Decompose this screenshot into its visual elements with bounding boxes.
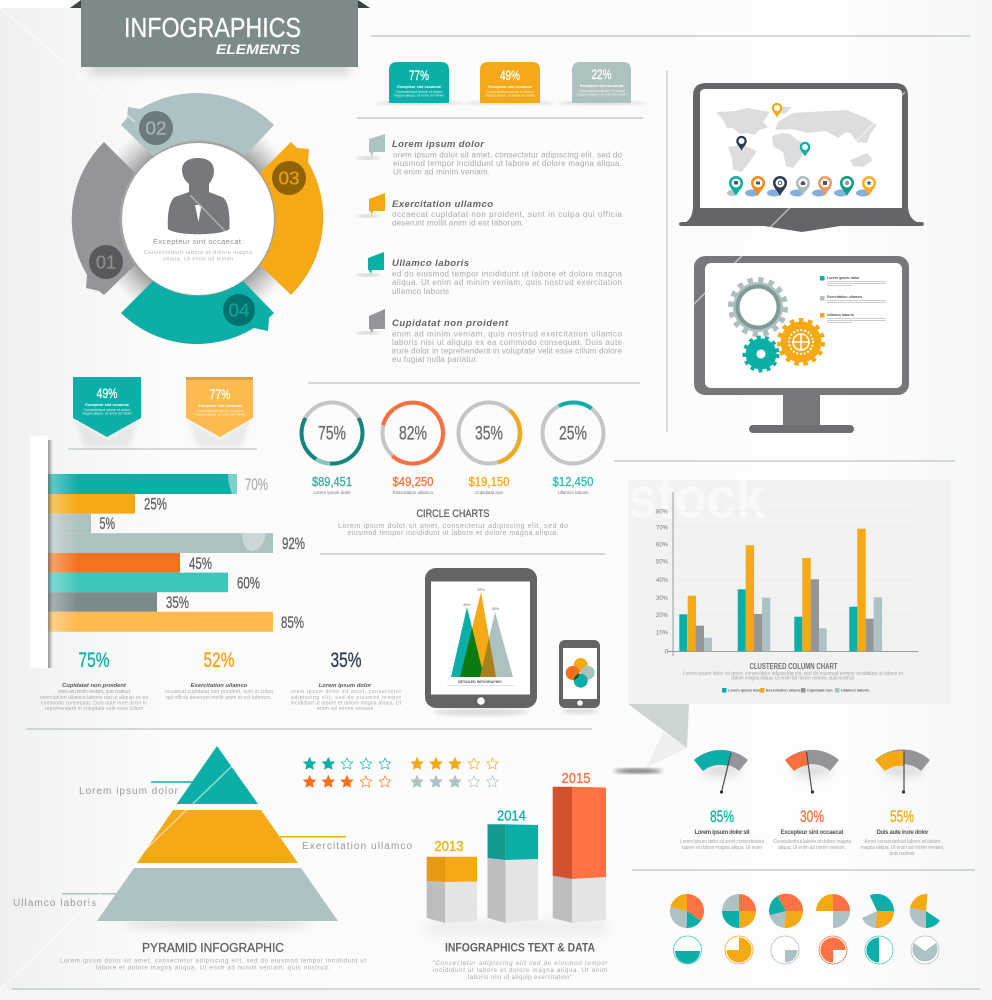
list item: Ullamco laboris: Ullamco laboris bbox=[392, 258, 469, 269]
circle chart 82%: 82% bbox=[399, 424, 427, 444]
red stars bbox=[304, 776, 391, 787]
circle chart 25% bbox=[542, 402, 604, 495]
horizontal bar chart bbox=[30, 436, 305, 668]
column 2013: 2013 bbox=[434, 838, 464, 855]
circle chart 25%: 25% bbox=[559, 424, 587, 444]
venn icon bbox=[566, 658, 595, 688]
icon pins row bbox=[727, 176, 876, 196]
column 2015: 2015 bbox=[562, 770, 590, 787]
ring 3 bbox=[771, 936, 799, 964]
gear: grey bbox=[731, 280, 785, 334]
chart legend: Cupidatat non bbox=[807, 688, 833, 692]
column chart caption: incididunt ut labore et dolore magna aliqua. Ut enim bbox=[433, 968, 607, 974]
circle chart 75%: $89,451 bbox=[312, 474, 352, 489]
chart axes and ticks: 70% bbox=[656, 526, 669, 532]
column 2014: 2014 bbox=[497, 808, 526, 824]
chart axes and ticks: 30% bbox=[656, 596, 669, 602]
stat: 35%: 35% bbox=[330, 649, 362, 672]
stat: 35%: orem ipsum dolor sit amet, consectetur bbox=[291, 689, 401, 695]
ribbon: 49%: magna aliqua. Ut enim ad minim bbox=[82, 412, 132, 416]
percent card: 49%: magna aliqua. Ut enim ad minim bbox=[485, 94, 535, 98]
stat: 75%: reprehenderit in voluptate velit esse cillum bbox=[45, 706, 143, 712]
segment 01: 01 bbox=[96, 252, 116, 272]
chart axes and ticks: 80% bbox=[656, 510, 669, 516]
clustered column chart panel: stock bbox=[628, 466, 766, 531]
triangle chart: 60% bbox=[463, 603, 471, 607]
pie 2 bbox=[722, 894, 756, 928]
orange stars bbox=[411, 758, 498, 769]
circle charts caption bbox=[338, 508, 568, 537]
percent card: 49%: Consectedout labore et dolore bbox=[487, 90, 533, 94]
ribbon: 77%: magna aliqua. Ut enim ad minim bbox=[195, 412, 245, 416]
list item: Cupidatat non proident: laboris nisi ut aliquip ex ea commodo consequat. Duis aute bbox=[392, 338, 623, 347]
pie 5 bbox=[862, 894, 894, 928]
chart title bbox=[683, 662, 904, 682]
gauge: 85%: Lorem ipsum dolor sit bbox=[694, 830, 750, 836]
gauge: 55%: quis nostrud. bbox=[890, 851, 916, 857]
gauge: 85% bbox=[680, 750, 765, 851]
ribbon: 77%: Excepteur sint occaecat bbox=[198, 404, 242, 408]
triangle chart: DETAILED INFOGRAPHIC bbox=[458, 680, 502, 684]
ring 5 bbox=[865, 936, 893, 964]
bar value labels: 5% bbox=[100, 514, 115, 533]
center circle with person bbox=[122, 143, 274, 295]
stat: 35%: incididunt ut labore et dolore magna aliqua. Ut bbox=[291, 700, 402, 706]
list item: Cupidatat non proident: irure dolor in reprehenderit in voluptate velit esse cillum dolore bbox=[392, 346, 623, 356]
bar value labels: 70% bbox=[245, 475, 268, 494]
percent card: 49%: 49% bbox=[500, 67, 520, 83]
gauge: 30%: aliqua. Ut enim ad minim veniam. bbox=[778, 845, 846, 851]
circle charts bbox=[302, 402, 604, 495]
center circle with person: Excepteur sint occaecat bbox=[153, 237, 242, 246]
3D column chart bbox=[427, 770, 608, 981]
ring 6 bbox=[911, 936, 939, 964]
gear legend bbox=[820, 276, 886, 323]
pyramid infographic: labore et dolore magna aliqua. Ut enim ad minim veniam, quis nostrud. bbox=[96, 966, 330, 972]
ribbon: 49% bbox=[73, 377, 141, 447]
ribbon: 49%: Consectedout labore et dolore bbox=[84, 408, 130, 412]
list item: Ullamco laboris bbox=[357, 252, 623, 296]
gauge: 30%: Excepteur sint occaecat bbox=[780, 830, 844, 836]
gauge: 55%: Duis aute irure dolor bbox=[876, 830, 929, 836]
circle charts caption: CIRCLE CHARTS bbox=[416, 508, 490, 520]
column chart caption bbox=[432, 940, 608, 981]
circle charts caption: eiusmod tempor incididunt ut labore et dolore magna aliqua. bbox=[348, 530, 559, 537]
chart legend: Ullamco laboris bbox=[841, 688, 869, 692]
gauge: 30%: 30% bbox=[800, 807, 824, 826]
gauge: 85%: Lorem ipsum dolor sit amet,consectedout bbox=[680, 839, 765, 845]
ribbon: 49%: 49% bbox=[96, 385, 118, 401]
percent card: 49%: Excepteur sint occaecat bbox=[488, 85, 532, 89]
pyramid infographic: Exercitation ullamco bbox=[302, 841, 412, 852]
bar value labels: 45% bbox=[189, 554, 212, 573]
triangle chart: 55% bbox=[492, 607, 499, 611]
stat: 52% bbox=[165, 649, 273, 701]
chart title: dolore magna aliqua. Ut enim ad minim veniam, quis nostrud. bbox=[731, 676, 855, 682]
percent card: 22%: 22% bbox=[592, 66, 612, 82]
chart legend: Exercitation ullamco bbox=[766, 688, 804, 692]
circle chart 25%: Ullamco laboris bbox=[558, 490, 589, 495]
chart legend bbox=[722, 688, 869, 692]
pyramid infographic: Lorem ipsum dolor sit amet, consectetur adipiscing elit, sed do eiusmod tempor incididunt ut bbox=[60, 958, 366, 964]
list item: Exercitation ullamco: occaecat cupidatat non proident, sunt in culpa qui officia bbox=[392, 210, 623, 219]
list item: Exercitation ullamco: deserunt mollit anim id est laborum. bbox=[392, 218, 524, 228]
list item: Ullamco laboris: ed do eiusmod tempor incididunt ut labore et dolore magna bbox=[392, 270, 623, 278]
gear legend: Lorem ipsum dolor bbox=[827, 276, 860, 280]
column 2015 bbox=[553, 770, 606, 923]
header banner bbox=[70, 0, 370, 74]
gauge: 55%: magna aliqua. Ut enim ad minim veniam, bbox=[860, 845, 944, 851]
clustered column chart panel bbox=[628, 466, 951, 704]
stat: 35%: Lorem ipsum dolor bbox=[319, 683, 372, 689]
stat: 52%: Exercitation ullamco bbox=[191, 683, 248, 689]
stat: 35%: adipiscing elit, sed do eiusmod tempor bbox=[291, 695, 401, 701]
segment 01 bbox=[72, 142, 135, 295]
circle chart 75%: 75% bbox=[318, 424, 346, 444]
chart axes and ticks bbox=[656, 492, 918, 656]
list item: Cupidatat non proident: enim ad minim veniam, quis nostrud exercitation ullamco bbox=[392, 330, 623, 338]
list item: Cupidatat non proident bbox=[357, 309, 623, 364]
center circle with person: Consectedout labore et dolore magna bbox=[144, 250, 253, 256]
ribbon: 77% bbox=[186, 377, 253, 447]
pie 3 bbox=[769, 894, 803, 928]
triangle chart bbox=[447, 588, 514, 686]
icon: person bbox=[168, 158, 230, 234]
world map bbox=[716, 107, 877, 172]
teal stars bbox=[304, 758, 391, 769]
list item: Lorem ipsum dolor bbox=[357, 134, 623, 176]
ring 4 bbox=[819, 936, 847, 964]
list item: Lorem ipsum dolor: Lorem ipsum dolor bbox=[392, 139, 485, 150]
gear: orange bbox=[780, 320, 822, 364]
column chart caption: INFOGRAPHICS TEXT & DATA bbox=[445, 940, 595, 954]
ribbon: 77%: Consectedout labore et dolore bbox=[197, 409, 243, 413]
circle chart 75%: Lorem ipsum dolor bbox=[313, 490, 351, 495]
circular process diagram bbox=[72, 93, 323, 344]
pie 1 bbox=[670, 894, 704, 928]
chart axes and ticks: 50% bbox=[656, 560, 669, 566]
text list bbox=[357, 134, 623, 364]
circle chart 35%: $19,150 bbox=[468, 474, 510, 489]
tablet bbox=[425, 568, 537, 716]
triangle chart: 82% bbox=[477, 588, 485, 592]
segment 04 bbox=[121, 281, 274, 344]
bar value labels: 85% bbox=[281, 613, 304, 632]
stat: 75%: Cupidatat non proident bbox=[62, 683, 127, 689]
percent card: 77%: Consectedout labore et dolore bbox=[396, 90, 442, 94]
pie icons row 2 bbox=[674, 936, 939, 964]
pyramid infographic bbox=[13, 746, 412, 972]
gear legend: Exercitation ullamco bbox=[827, 295, 863, 299]
chart axes and ticks: 60% bbox=[656, 542, 669, 548]
list item: Lorem ipsum dolor: Ut enim ad minim veniam. bbox=[393, 168, 490, 176]
pyramid infographic: Ullamco laboris bbox=[13, 898, 96, 909]
ring 1 bbox=[674, 936, 702, 964]
laptop with world map bbox=[679, 83, 924, 232]
percent card: 22%: Excepteur sint occaecat bbox=[580, 84, 624, 88]
stat: 52%: occaecat cupidatat non proident, sunt in culpa bbox=[165, 689, 273, 695]
pie 4 bbox=[816, 894, 850, 928]
circle chart 35% bbox=[458, 402, 520, 495]
desktop monitor with gears bbox=[694, 256, 909, 433]
stat: 52%: qui officia deserunt mollit anim id est laborum. bbox=[166, 695, 272, 701]
chart legend: Lorem ipsum dolor bbox=[728, 688, 763, 692]
list item: Ullamco laboris: aliqua. Ut enim ad minim veniam, quis nostrud exercitation bbox=[392, 278, 622, 287]
stat: 35% bbox=[291, 649, 402, 712]
gauge: 55% bbox=[860, 749, 944, 857]
list item: Cupidatat non proident: eu fugiat nulla pariatur. bbox=[392, 355, 478, 364]
star ratings bbox=[304, 758, 498, 787]
stat: 75% bbox=[40, 649, 148, 712]
gauge: 85%: 85% bbox=[710, 807, 734, 826]
chart axes and ticks: 20% bbox=[656, 613, 669, 619]
column 2014 bbox=[488, 808, 538, 923]
circle chart 82%: Exercitation ullamco bbox=[393, 490, 434, 495]
list item: Ullamco laboris: ullamco laboris bbox=[392, 287, 449, 296]
list item: Exercitation ullamco: Exercitation ullamco bbox=[392, 199, 493, 210]
bar value labels: 35% bbox=[166, 593, 189, 612]
circle chart 35%: Cupidatat non bbox=[475, 490, 504, 495]
circle chart 82%: $49,250 bbox=[392, 474, 434, 489]
ribbon: 77%: 77% bbox=[210, 386, 230, 402]
pyramid infographic: Lorem ipsum dolor bbox=[79, 786, 179, 797]
chart axes and ticks: 10% bbox=[656, 630, 669, 636]
list item: Exercitation ullamco bbox=[357, 193, 623, 228]
percent card: 77%: Excepteur sint occaecat bbox=[397, 85, 441, 89]
gear: teal bbox=[744, 338, 778, 370]
gauge: 55%: 55% bbox=[890, 807, 914, 826]
list item: Lorem ipsum dolor: orem ipsum dolor sit amet, consectetur adipiscing elit, sed do bbox=[393, 150, 623, 160]
circle chart 25%: $12,450 bbox=[552, 474, 594, 489]
column 2013 bbox=[427, 838, 477, 923]
stat: 75%: commodo consequat. Duis aute irure dolor in bbox=[41, 700, 147, 706]
grey stars bbox=[411, 776, 498, 787]
chart axes and ticks: 0 bbox=[665, 650, 669, 656]
map pins bbox=[736, 103, 810, 157]
column chart caption: "Consectetur adipiscing elit sed do eiusmod tempor bbox=[432, 961, 608, 967]
percent card: 77%: magna aliqua. Ut enim ad minim bbox=[394, 94, 444, 98]
percent card: 77%: 77% bbox=[409, 67, 429, 83]
gauge: 85%: labore et dolore magna aliqua. Ut enim bbox=[682, 845, 762, 851]
ring 2 bbox=[725, 936, 753, 964]
header banner: ELEMENTS bbox=[216, 41, 301, 57]
segment 02: 02 bbox=[146, 118, 166, 138]
smartphone bbox=[559, 640, 600, 714]
pie 6 bbox=[910, 894, 940, 928]
circle chart 82% bbox=[382, 402, 444, 495]
circle chart 75% bbox=[302, 402, 362, 495]
pyramid infographic: PYRAMID INFOGRAPHIC bbox=[142, 940, 284, 955]
stat: 75%: exercitation ullamco laboris nisi ut aliquip ex ea bbox=[40, 695, 148, 701]
percent card: 77% bbox=[375, 62, 463, 104]
percent card: 22%: magna aliqua. Ut enim ad minim bbox=[576, 92, 627, 96]
pie icons row 1 bbox=[670, 894, 940, 928]
segment 03 bbox=[260, 142, 323, 295]
gear legend: Ullamco laboris bbox=[827, 313, 854, 317]
ribbon: 49%: Excepteur sint occaecat bbox=[85, 403, 129, 407]
bar value labels: 92% bbox=[282, 534, 305, 553]
bar value labels: 25% bbox=[144, 494, 167, 514]
stat: 75%: enim ad minim veniam, quis nostrud bbox=[58, 689, 130, 695]
stat: 52%: 52% bbox=[204, 649, 234, 672]
percent card: 22% bbox=[558, 62, 646, 104]
circle chart 35%: 35% bbox=[475, 424, 503, 444]
list item: Lorem ipsum dolor: eiusmod tempor incididunt ut labore et dolore magna aliqua. bbox=[393, 159, 622, 168]
bar value labels: 60% bbox=[237, 574, 260, 592]
gauge: 55%: Amet consectedout labore et dolore bbox=[864, 839, 941, 845]
folded paper corner bbox=[614, 704, 689, 773]
stat: 75%: 75% bbox=[78, 649, 110, 672]
circle charts caption: Lorem ipsum dolor sit amet, consectetur adipiscing elit, sed do bbox=[338, 523, 568, 530]
gauge: 30%: Consectedout labore et dolore magna bbox=[773, 839, 851, 845]
stat: 35%: enim ad minim veniam. bbox=[317, 706, 375, 712]
center circle with person: aliqua. Ut enim ad minim bbox=[163, 256, 233, 262]
segment 04: 04 bbox=[228, 300, 250, 320]
segment 03: 03 bbox=[278, 168, 300, 188]
columns bbox=[679, 529, 882, 651]
gauge: 30% bbox=[773, 750, 851, 851]
list item: Cupidatat non proident: Cupidatat non proident bbox=[392, 318, 509, 329]
chart title: CLUSTERED COLUMN CHART bbox=[750, 662, 838, 671]
segment 02 bbox=[121, 93, 274, 156]
bar value labels bbox=[100, 475, 305, 632]
column chart caption: laboris nisi ut aliquip exercitation" bbox=[468, 975, 572, 981]
percent card: 49% bbox=[466, 62, 554, 104]
chart title: Lorem ipsum dolor sit amet, consectetur adipiscing elit, sed do eiusmod tempor incididunt ut labore et bbox=[683, 671, 904, 677]
chart axes and ticks: 40% bbox=[656, 578, 669, 584]
percent card: 22%: Consectedout labore et dolore bbox=[578, 89, 625, 93]
header banner: INFOGRAPHICS bbox=[124, 12, 301, 43]
